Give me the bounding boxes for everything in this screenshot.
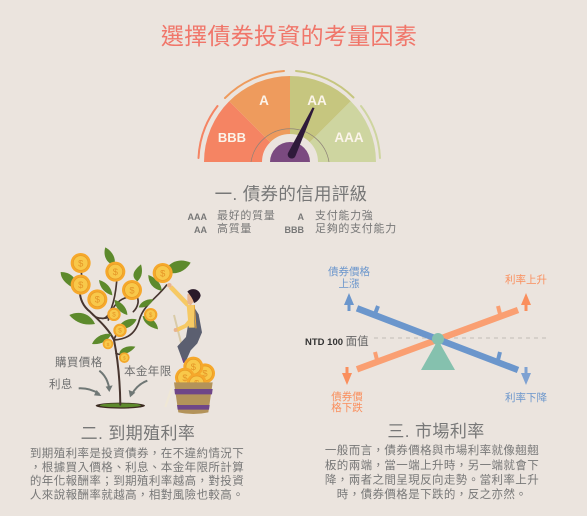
seesaw labels [328,265,547,414]
rating legend: AAA [188,212,207,222]
coins: $ [95,295,101,305]
fulcrum [421,340,455,370]
coin bucket: $ [191,362,197,372]
ladder [174,315,188,372]
seesaw labels: 利率下降 [505,391,547,404]
legs and overalls [177,305,202,362]
rating legend: 足夠的支付能力 [315,221,397,235]
tree labels [49,355,172,391]
gauge chart: A [259,93,269,108]
arrows [79,371,147,395]
paragraph: market rate: 一般而言，債券價格與市場利率就像翹翹 [325,443,539,457]
coins: $ [78,258,84,268]
heading: yield to maturity: 二. 到期殖利率 [81,424,195,443]
paragraph: market rate: 降，兩者之間呈現反向走勢。當利率上升 [325,472,539,486]
seesaw labels: 格下跌 [331,401,363,414]
coin bucket: $ [202,369,208,379]
rating legend: 高質量 [217,221,252,235]
seesaw labels: 利率上升 [505,273,547,286]
tree labels: 購買價格 [55,355,103,369]
soil [96,403,145,409]
coins [71,253,173,363]
branches [80,263,167,405]
coins: $ [107,342,110,348]
coins: $ [118,328,122,335]
paragraph: market rate: 板的兩端，當一端上升時，另一端就會下 [325,458,539,472]
gauge chart [198,71,380,162]
seesaw labels: 債券價格 [328,265,370,278]
paragraph: yield to maturity: 到期殖利率是投資債券，在不違約情況下 [30,446,244,460]
coins: $ [160,268,166,278]
seesaw chart [342,293,548,385]
paragraph: yield to maturity: 的年化報酬率；到期殖利率越高，對投資 [30,474,244,488]
tree illustration [61,247,191,409]
gauge chart: AAA [334,130,364,145]
blue beam [357,306,518,370]
title: 選擇債券投資的考量因素 [161,23,417,49]
leaves [61,272,77,290]
shirt and arms [171,287,188,305]
up and down arrows [344,293,354,311]
coins: $ [112,312,116,319]
coins: $ [149,312,153,319]
hands [167,283,172,288]
gauge chart: BBB [218,130,246,145]
rating legend [188,208,397,235]
heading: credit rating: 一. 債券的信用評級 [215,184,367,204]
coin bucket: $ [194,379,200,389]
rating legend: 最好的質量 [217,208,276,222]
heading: market rate: 三. 市場利率 [387,422,485,441]
coin bucket [174,357,215,414]
head and hair [187,294,194,306]
paragraph: yield to maturity: 人來說報酬率就越高，相對風險也較高。 [30,488,244,502]
paragraph: market rate [325,443,539,501]
gauge chart: AA [307,93,327,108]
gauge needle [288,108,314,159]
coins: $ [78,280,84,290]
paragraph: yield to maturity [30,446,244,502]
seesaw labels: 債券價 [331,390,363,403]
rating legend: A [298,212,304,222]
par value label: NTD 100 面值 [305,335,369,348]
coin bucket: $ [182,373,188,383]
rating legend: 支付能力強 [315,209,374,222]
coins: $ [129,285,135,295]
tree labels: 利息 [49,377,73,391]
paragraph: yield to maturity: ，根據買入價格、利息、本金年限所計算 [30,460,244,474]
orange beam [357,306,518,369]
paragraph: market rate: 時，債券價格是下跌的，反之亦然。 [337,487,527,501]
woman on ladder [165,283,202,407]
coins: $ [123,355,126,361]
seesaw labels: 上漲 [338,278,360,290]
rating legend: AA [194,225,207,235]
tree labels: 本金年限 [124,364,172,378]
rating legend: BBB [284,225,304,235]
coins: $ [113,267,119,277]
